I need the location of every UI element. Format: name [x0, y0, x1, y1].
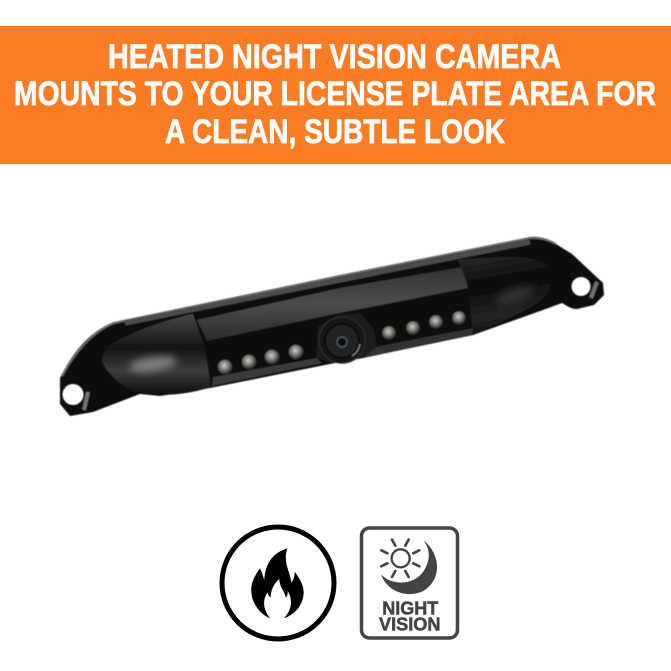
bracket hole accents [84, 282, 597, 410]
heading text: HEATED NIGHT VISION CAMERA [108, 38, 561, 76]
LED lights right group [382, 311, 466, 340]
header banner [0, 26, 671, 164]
right bullet cap [458, 257, 552, 335]
central bar top band [197, 267, 468, 341]
lower strip [212, 358, 322, 386]
night vision label: NIGHT [382, 598, 438, 618]
heading text [14, 38, 656, 151]
camera lens [316, 313, 377, 363]
bracket top edge highlight [62, 238, 556, 376]
night vision label: VISION [379, 615, 440, 635]
LED lights left group [218, 344, 304, 374]
icon: heated flame [222, 527, 334, 639]
night vision label [379, 598, 440, 635]
mounting bracket [60, 237, 604, 416]
camera bar product photo [60, 237, 604, 416]
left bullet cap [102, 314, 211, 395]
heading text: A CLEAN, SUBTLE LOOK [165, 113, 505, 151]
icon: night vision [362, 528, 458, 638]
LED panel [207, 288, 473, 377]
sun and moon [381, 540, 437, 594]
